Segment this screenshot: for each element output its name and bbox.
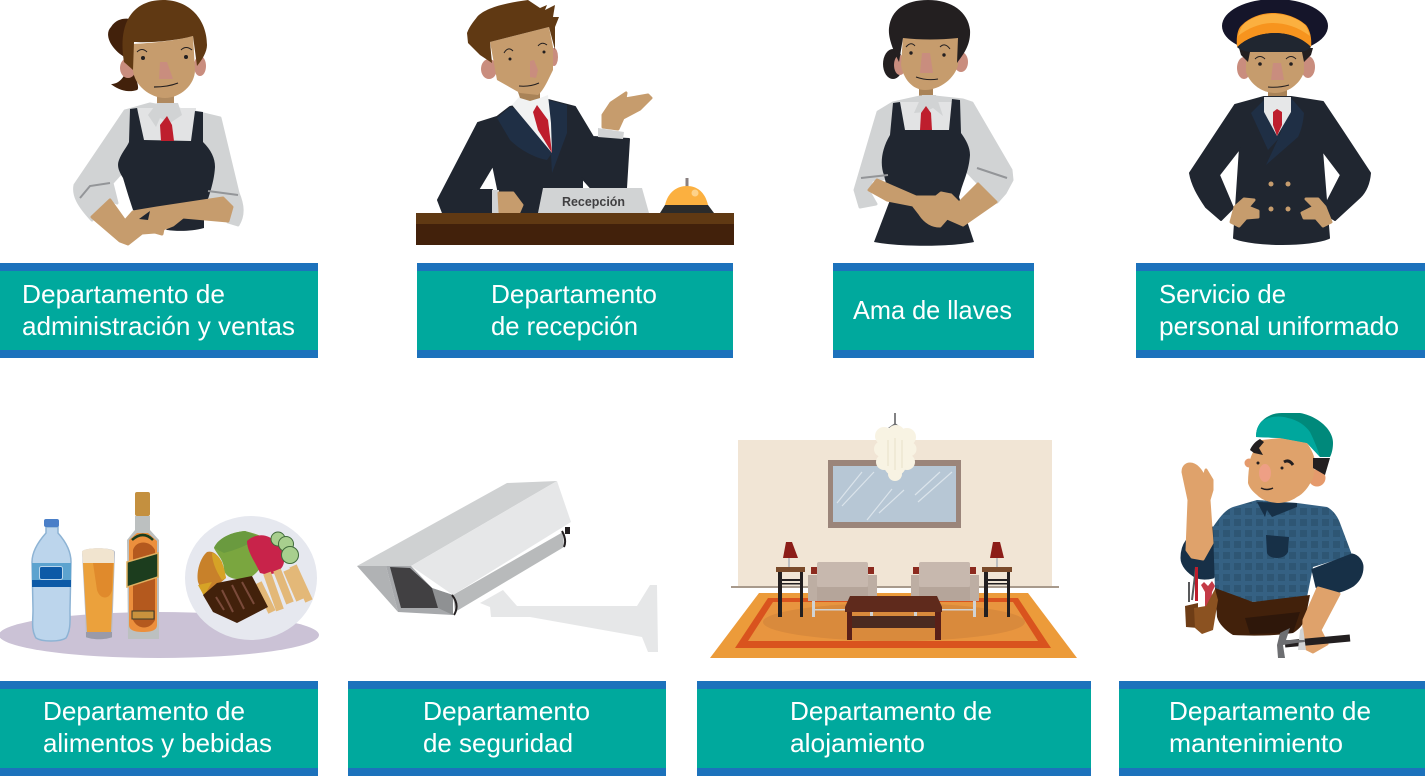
- hammer: [1277, 627, 1350, 658]
- rug: [710, 593, 1077, 658]
- icon: whisky bottle: [127, 492, 159, 639]
- icon: service bell: [660, 178, 714, 213]
- illustration: housekeeper: [855, 0, 1012, 246]
- name plate: Recepción: [538, 188, 649, 213]
- label: Departamento de seguridad: de seguridad: [423, 728, 573, 758]
- mirror: [828, 460, 961, 528]
- label: Departamento de seguridad: Departamento: [423, 696, 590, 726]
- illustration: security camera: [357, 481, 658, 652]
- label: Ama de llaves: Ama de llaves: [853, 295, 1012, 325]
- icon: beer glass: [82, 548, 115, 639]
- label: Departamento de mantenimiento: [1119, 681, 1425, 776]
- coffee table: [845, 596, 942, 640]
- label: Departamento de alojamiento: [697, 681, 1091, 776]
- illustration: administration woman: [75, 0, 242, 244]
- label: Departamento de mantenimiento: mantenimiento: [1169, 728, 1343, 758]
- illustration: food and drinks: [0, 492, 319, 658]
- armchair left: [808, 562, 877, 617]
- icon: food plate: [185, 516, 317, 640]
- label: Departamento de mantenimiento: Departamento de: [1169, 696, 1371, 726]
- label: Departamento de administración y ventas: [0, 263, 318, 358]
- side table and lamp left: [776, 542, 805, 617]
- label: Departamento de recepción: de recepción: [491, 311, 638, 341]
- wall mount: [480, 585, 658, 652]
- label: Departamento de administración y ventas: administración y ventas: [22, 311, 295, 341]
- label: Servicio de personal uniformado: personal uniformado: [1159, 311, 1399, 341]
- label: Departamento de alimentos y bebidas: Departamento de: [43, 696, 245, 726]
- icon: water bottle: [32, 519, 71, 641]
- label: Ama de llaves: [833, 263, 1034, 358]
- label: Departamento de recepción: [417, 263, 733, 358]
- chandelier: [874, 413, 916, 481]
- illustration: reception man at desk: [416, 0, 734, 245]
- illustration: hotel room: [710, 413, 1077, 658]
- camera body: [357, 481, 571, 615]
- label: Departamento de seguridad: [348, 681, 666, 776]
- label: Departamento de alimentos y bebidas: alimentos y bebidas: [43, 728, 272, 758]
- side table and lamp right: [982, 542, 1012, 617]
- illustration: uniformed doorman: [1190, 0, 1370, 244]
- label: Servicio de personal uniformado: Servicio de: [1159, 279, 1286, 309]
- label: Departamento de recepción: Departamento: [491, 279, 657, 309]
- label: Departamento de alojamiento: Departamento de: [790, 696, 992, 726]
- armchair right: [911, 562, 979, 617]
- label: Servicio de personal uniformado: [1136, 263, 1425, 358]
- reception desk: [416, 213, 734, 245]
- label: Departamento de alimentos y bebidas: [0, 681, 318, 776]
- name plate: Recepción: Recepción: [562, 194, 625, 209]
- label: Departamento de administración y ventas: Departamento de: [22, 279, 225, 309]
- tool pouch: [1185, 567, 1218, 634]
- illustration: maintenance worker: [1182, 413, 1362, 658]
- label: Departamento de alojamiento: alojamiento: [790, 728, 925, 758]
